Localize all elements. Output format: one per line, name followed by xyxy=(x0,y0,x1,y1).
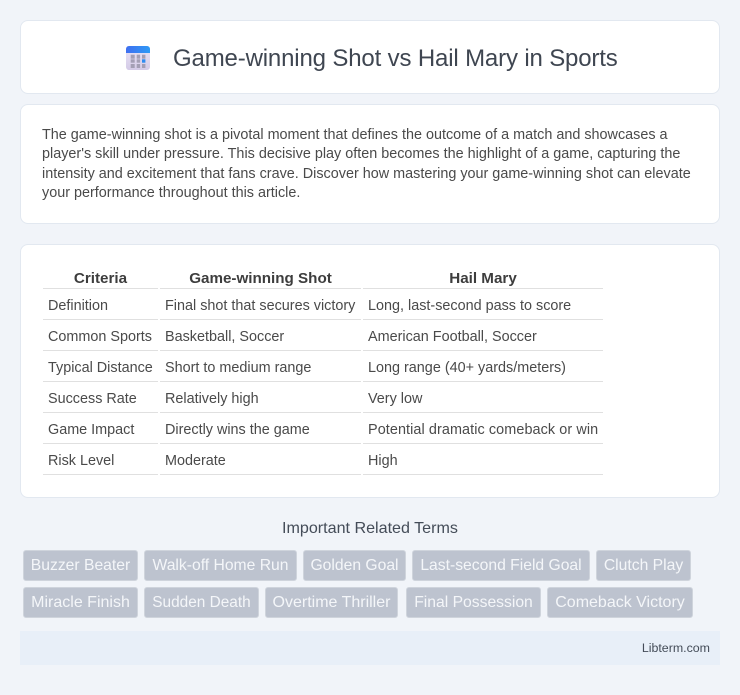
column headers: Criteria xyxy=(74,270,127,287)
footer bar xyxy=(20,631,720,665)
intro text: The game-winning shot is a pivotal moment that defines the outcome of a match and showcases a xyxy=(42,127,668,143)
tag: Buzzer Beater xyxy=(31,557,130,574)
tag xyxy=(144,550,297,581)
tag: Golden Goal xyxy=(310,557,399,574)
tag: Final Possession xyxy=(414,594,533,611)
intro text: player's skill under pressure. This decisive play often becomes the highlight of a game, capturing the xyxy=(42,146,680,162)
column headers: Hail Mary xyxy=(449,270,517,287)
row: success rate: Relatively high xyxy=(165,391,259,407)
icon: calendar grid xyxy=(126,46,150,70)
tag xyxy=(23,550,138,581)
row: risk level: Moderate xyxy=(165,453,226,469)
row: common sports: American Football, Soccer xyxy=(368,329,537,345)
tag: Last-second Field Goal xyxy=(420,557,582,574)
row: common sports: Common Sports xyxy=(48,329,152,345)
row: game impact: Game Impact xyxy=(48,422,134,438)
row: typical distance xyxy=(48,360,566,376)
row: success rate: Success Rate xyxy=(48,391,137,407)
tag: Clutch Play xyxy=(604,557,683,574)
intro text: intensity and excitement that fans crave. Discover how mastering your game-winning shot can elevate xyxy=(42,166,691,182)
row: definition: Final shot that secures victory xyxy=(165,298,355,314)
row: typical distance: Short to medium range xyxy=(165,360,311,376)
row: definition xyxy=(48,298,571,314)
column headers xyxy=(74,270,517,287)
tag xyxy=(412,550,590,581)
row: game impact: Potential dramatic comeback or win xyxy=(368,422,598,438)
footer credit: Libterm.com xyxy=(642,641,710,655)
row: risk level: Risk Level xyxy=(48,453,114,469)
row: typical distance: Long range (40+ yards/meters) xyxy=(368,360,566,376)
intro text xyxy=(42,127,691,201)
table xyxy=(43,270,603,475)
tag: Miracle Finish xyxy=(31,594,130,611)
related term tags xyxy=(23,550,693,618)
intro text: your performance throughout this article. xyxy=(42,185,300,201)
title: Game-winning Shot vs Hail Mary in Sports xyxy=(173,45,618,72)
panel: introduction xyxy=(20,104,720,224)
tag xyxy=(303,550,406,581)
row: success rate xyxy=(48,391,422,407)
row: common sports xyxy=(48,329,537,345)
row: game impact: Directly wins the game xyxy=(165,422,310,438)
row: success rate: Very low xyxy=(368,391,422,407)
row: risk level: High xyxy=(368,453,398,469)
row: game impact xyxy=(48,422,598,438)
tag: Comeback Victory xyxy=(555,594,685,611)
row: definition: Definition xyxy=(48,298,108,314)
tag: Sudden Death xyxy=(152,594,251,611)
panel: title card xyxy=(20,20,720,94)
tag xyxy=(547,587,693,618)
row: definition: Long, last-second pass to score xyxy=(368,298,571,314)
tag: Walk-off Home Run xyxy=(152,557,288,574)
row: typical distance: Typical Distance xyxy=(48,360,153,376)
tag xyxy=(144,587,259,618)
tag xyxy=(406,587,541,618)
panel: comparison table xyxy=(20,244,720,498)
tag: Overtime Thriller xyxy=(273,594,390,611)
row: common sports: Basketball, Soccer xyxy=(165,329,284,345)
tag xyxy=(23,587,138,618)
heading: related terms: Important Related Terms xyxy=(282,519,458,537)
tag xyxy=(265,587,398,618)
tag xyxy=(596,550,691,581)
row: risk level xyxy=(48,453,398,469)
column headers: Game-winning Shot xyxy=(189,270,332,287)
